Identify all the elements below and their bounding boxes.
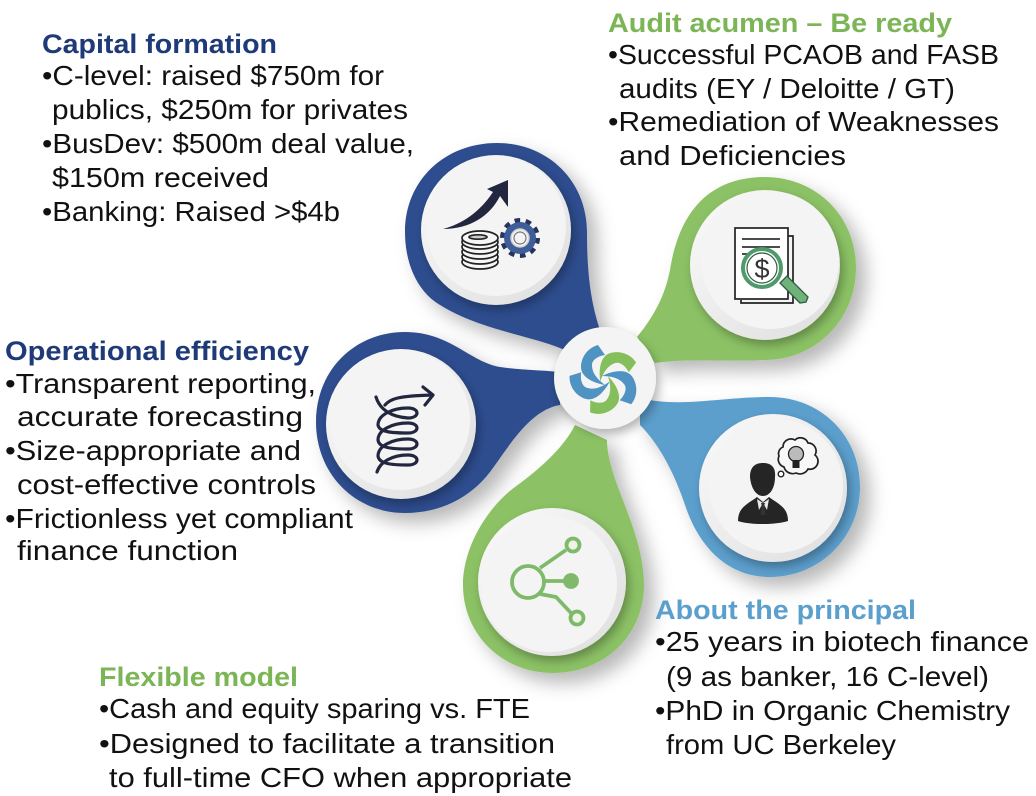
text block: flexible model: Flexible model (99, 662, 298, 692)
text block: flexible model: to full-time CFO when appropriate (109, 762, 572, 793)
text block: audit acumen: audits (EY / Deloitte / GT) (619, 73, 955, 104)
petal: capital formation (405, 143, 600, 350)
icon: spiral arrow (376, 387, 433, 472)
petal: about the principal (640, 397, 860, 577)
text block: flexible model: •Designed to facilitate a transition (99, 728, 555, 759)
icon: person with idea (738, 438, 818, 524)
text block: about the principal: (9 as banker, 16 C-level) (666, 661, 989, 692)
petal: operational efficiency (316, 332, 560, 513)
text block: operational efficiency: Operational efficiency (5, 336, 309, 366)
text block: audit acumen: •Remediation of Weaknesses (608, 106, 999, 137)
text block: operational efficiency: •Size-appropriate and (5, 435, 301, 466)
center logo (554, 327, 656, 429)
text block: capital formation (42, 29, 414, 227)
icon: growth arrow, coins and gear (443, 180, 538, 269)
icon: document with magnifier: $ (754, 254, 770, 284)
text block: operational efficiency: cost-effective controls (17, 469, 316, 500)
text block: operational efficiency (5, 336, 353, 566)
text block: audit acumen (608, 8, 999, 171)
text block: operational efficiency: finance function (17, 535, 238, 566)
text block: capital formation: •BusDev: $500m deal value, (42, 128, 414, 159)
text block: about the principal: •25 years in biotech finance (655, 626, 1029, 657)
text block: about the principal: from UC Berkeley (666, 729, 896, 760)
text block: about the principal (655, 595, 1029, 760)
text block: operational efficiency: accurate forecasting (17, 401, 303, 432)
text block: audit acumen: •Successful PCAOB and FASB (608, 39, 999, 70)
text block: audit acumen: Audit acumen – Be ready (608, 8, 952, 38)
text block: operational efficiency: •Transparent reporting, (5, 368, 316, 399)
petal: audit acumen (637, 177, 856, 363)
text block: capital formation: $150m received (52, 162, 269, 193)
text block: flexible model: •Cash and equity sparing vs. FTE (99, 693, 530, 724)
icon: branching nodes (512, 538, 584, 624)
text block: about the principal: About the principal (655, 595, 916, 625)
text block: about the principal: •PhD in Organic Chemistry (655, 695, 1010, 726)
petal: flexible model (463, 425, 644, 673)
text block: capital formation: Capital formation (42, 29, 277, 59)
text block: operational efficiency: •Frictionless yet compliant (5, 503, 353, 534)
text block: capital formation: •Banking: Raised >$4b (42, 196, 340, 227)
text block: capital formation: publics, $250m for privates (52, 94, 408, 125)
icon: document with magnifier (735, 228, 808, 303)
text block: capital formation: •C-level: raised $750m for (42, 60, 384, 91)
text block: flexible model (99, 662, 572, 793)
text block: audit acumen: and Deficiencies (619, 140, 846, 171)
